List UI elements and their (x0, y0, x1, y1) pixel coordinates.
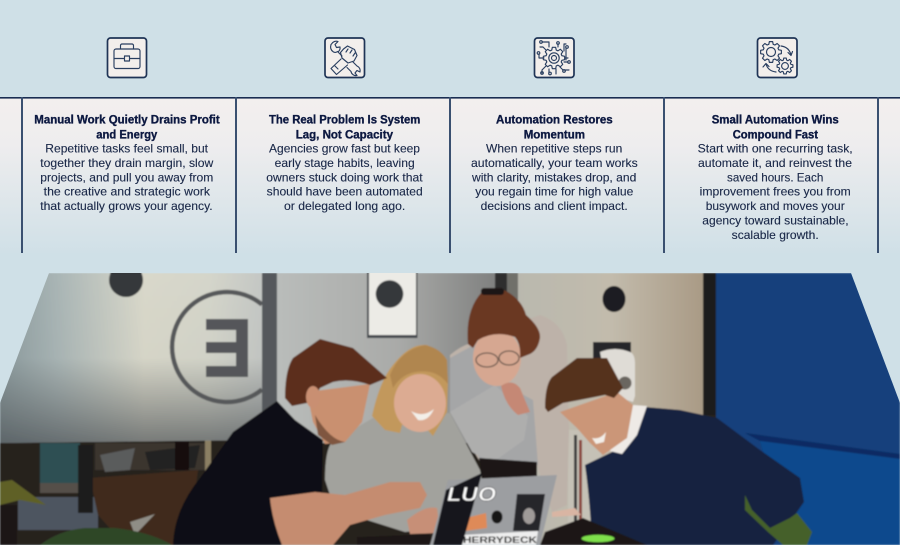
frosted glass wall (0, 263, 262, 443)
text block: column 3: Momentum (524, 127, 585, 141)
background chair (40, 528, 172, 545)
panel: column strip (0, 97, 900, 253)
centre wall and poster (262, 270, 518, 443)
icon: hand with wrenches (325, 38, 364, 78)
text block: column 1: Manual Work Quietly Drains Profit (34, 112, 220, 126)
text block: column 2: The Real Problem Is System (269, 112, 420, 126)
text block: column 2 (266, 112, 423, 213)
text block: column 4: saved hours. Each (727, 170, 823, 184)
text block: column 4: automate it, and reinvest the (698, 156, 852, 170)
laptop sticker lettering: LUO (447, 484, 497, 506)
table (357, 518, 647, 545)
text block: column 1: Repetitive tasks feel small, but (45, 142, 209, 156)
text block: column 3: decisions and client impact. (481, 199, 628, 213)
text block: column 2: Agencies grow fast but keep (269, 142, 420, 156)
laptop with stickers (430, 475, 557, 545)
text block: column 2: owners stuck doing work that (266, 170, 423, 184)
text block: column 4: Compound Fast (733, 127, 818, 141)
text block: column 4: improvement frees you from (700, 185, 851, 199)
icon: briefcase (108, 38, 146, 78)
green office chair (745, 495, 812, 545)
interior behind frosted glass (0, 440, 240, 545)
text block: column 3: When repetitive steps run (486, 142, 622, 156)
text block: column 3: automatically, your team works (471, 156, 638, 170)
text block: column 2: early stage habits, leaving (275, 156, 415, 170)
text block: column 3 (471, 112, 638, 213)
text block: column 3: you regain time for high value (475, 185, 634, 199)
icon: circuit gear (534, 38, 574, 78)
text block: column 1: projects, and pull you away from (40, 170, 213, 184)
text block: column 1 (34, 112, 220, 213)
text block: column 1: the creative and strategic work (44, 185, 211, 199)
text block: column 4: Start with one recurring task, (698, 142, 853, 156)
text block: column 4: Small Automation Wins (712, 112, 839, 126)
man in black shirt (173, 339, 427, 545)
text block: column 4 (698, 112, 853, 242)
text block: column 3: Automation Restores (496, 112, 613, 126)
green light on table (582, 535, 614, 542)
text block: column 3: with clarity, mistakes drop, and (471, 170, 636, 184)
blue wall (703, 273, 900, 545)
text block: column 1: that actually grows your agency. (40, 199, 213, 213)
beige wall with sensor and dispenser (518, 273, 704, 545)
text block: column 1: together they drain margin, slow (40, 156, 214, 170)
text block: column 2: or delegated long ago. (284, 199, 405, 213)
woman in grey cardigan (450, 288, 581, 517)
text block: column 2: should have been automated (267, 185, 423, 199)
text block: column 4: busywork and moves your (706, 199, 845, 213)
photo: team around a laptop (0, 263, 900, 545)
text block: column 4: agency toward sustainable, (702, 213, 849, 227)
dark tablet (433, 473, 482, 545)
woman in striped sweater (325, 345, 482, 534)
icon: gears with arrows (758, 38, 797, 78)
text block: column 4: scalable growth. (732, 228, 819, 242)
man in navy sweater (545, 358, 804, 545)
text block: column 2: Lag, Not Capacity (296, 127, 393, 141)
text block: column 1: and Energy (96, 127, 158, 141)
